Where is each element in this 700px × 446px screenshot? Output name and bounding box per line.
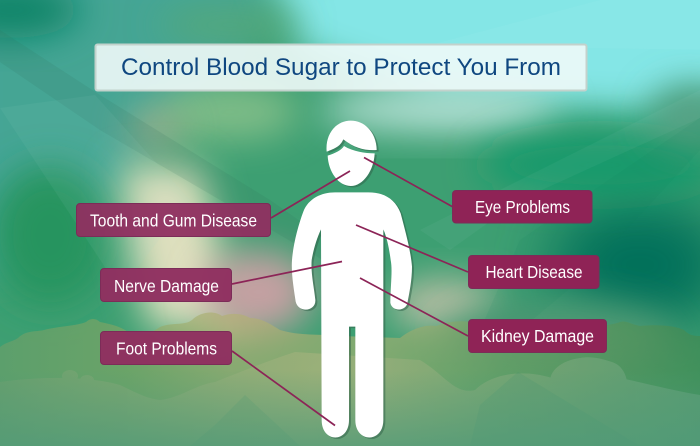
label: kidney damage: Kidney Damage (481, 326, 594, 346)
title text: Control Blood Sugar to Protect You From (121, 54, 561, 81)
label: kidney damage (468, 320, 606, 352)
back hill line (0, 313, 700, 446)
label: heart disease (468, 256, 599, 288)
title panel (96, 44, 586, 90)
figure: person (292, 121, 414, 439)
label: tooth and gum disease: Tooth and Gum Disease (90, 210, 257, 230)
label: nerve damage: Nerve Damage (114, 276, 219, 296)
label: eye problems (452, 190, 592, 223)
figure face (328, 146, 375, 186)
figure hair (327, 121, 377, 152)
label: foot problems: Foot Problems (116, 338, 217, 358)
front hill line (0, 352, 700, 446)
label: eye problems: Eye Problems (475, 197, 570, 217)
label: tooth and gum disease (76, 204, 270, 236)
figure body (292, 192, 412, 437)
label: nerve damage (100, 268, 232, 302)
figure shadow (294, 122, 414, 439)
hills (0, 313, 700, 446)
label: foot problems (100, 332, 232, 364)
label: heart disease: Heart Disease (486, 262, 582, 282)
connector lines (232, 158, 468, 426)
